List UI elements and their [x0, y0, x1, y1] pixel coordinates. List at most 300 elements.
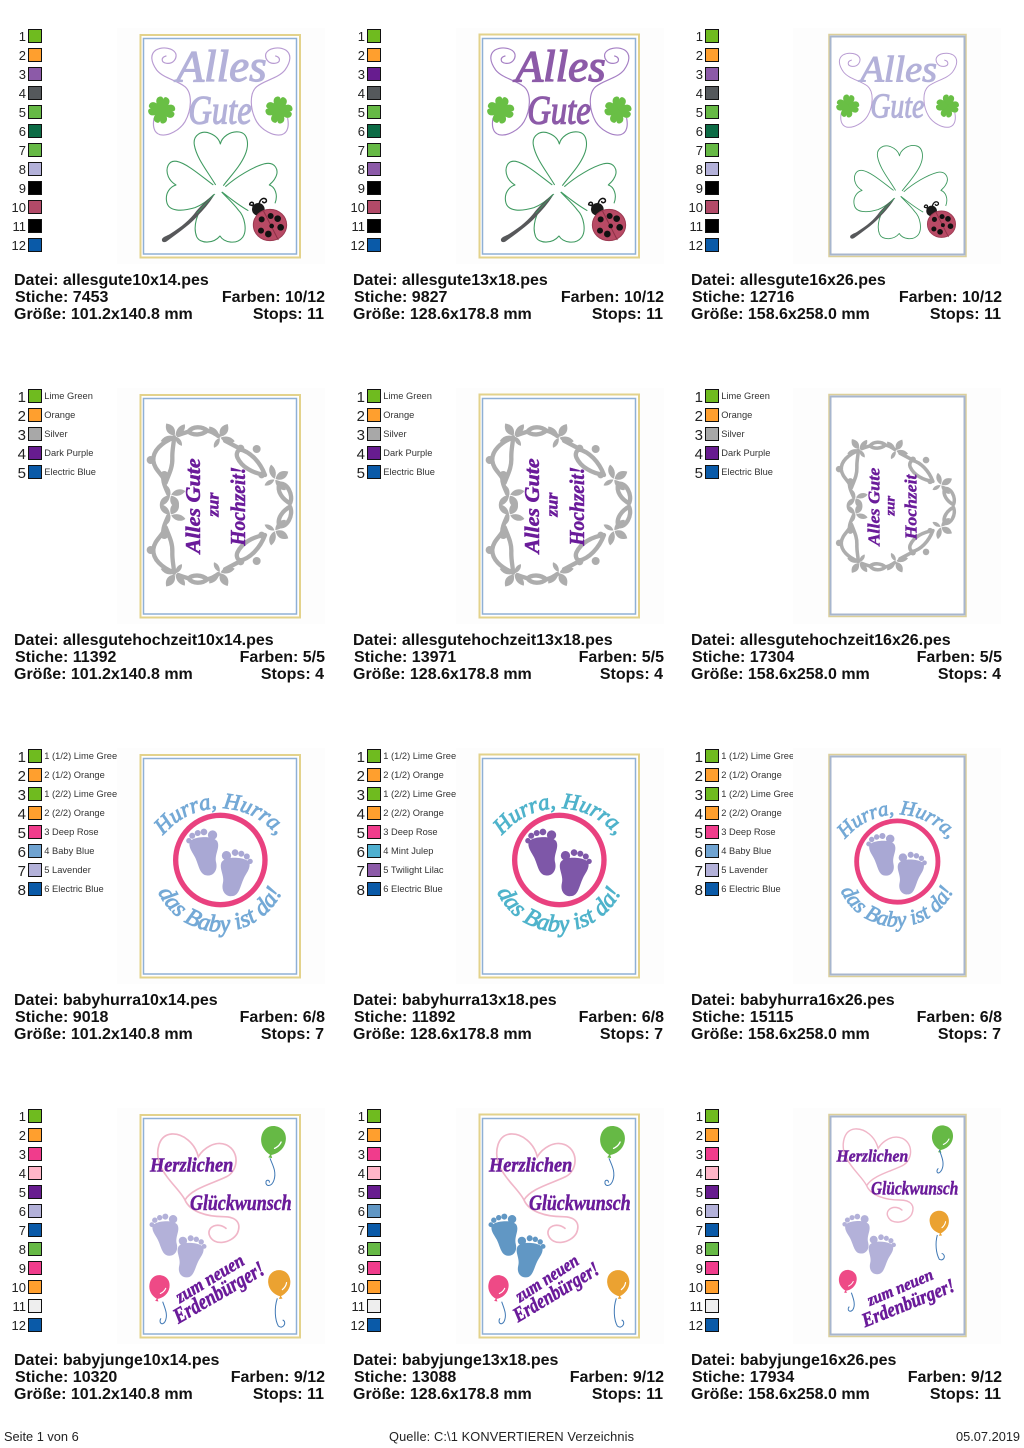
- colour legend: Orange: [383, 410, 414, 420]
- file details: Stiche: 9827: [354, 289, 447, 306]
- colour legend: 2: [18, 768, 26, 785]
- colour legend: 8: [358, 1242, 365, 1257]
- colour legend: 9: [19, 1261, 26, 1276]
- colour legend: 11: [12, 219, 26, 234]
- file details: Stops: 11: [930, 1386, 1001, 1403]
- colour legend: 8: [18, 882, 26, 899]
- file details: [14, 272, 325, 323]
- colour legend: 2: [19, 48, 26, 63]
- colour legend: 4 Baby Blue: [721, 846, 771, 856]
- colour legend: 3: [19, 1147, 26, 1162]
- colour legend: Dark Purple: [721, 448, 770, 458]
- colour legend: 9: [696, 1261, 703, 1276]
- embroidery: heart, feet, balloons, congratulations text: [836, 1124, 958, 1332]
- embroidery: Alles Gute clover: Alles: [513, 42, 606, 91]
- embroidery: heart, feet, balloons, congratulations text: Glückwunsch: [529, 1190, 631, 1215]
- colour legend: 3: [358, 67, 365, 82]
- file details: Datei: babyjunge10x14.pes: [14, 1352, 220, 1369]
- file details: Größe: 158.6x258.0 mm: [691, 1386, 870, 1403]
- card frame: [793, 388, 1001, 624]
- embroidery: heart, feet, balloons, congratulations text: [147, 1124, 292, 1329]
- colour legend: [689, 29, 718, 253]
- colour legend: 2: [696, 1128, 703, 1143]
- embroidery: heart, feet, balloons, congratulations text: zum neuen: [171, 1250, 248, 1308]
- colour legend: [689, 1109, 718, 1333]
- colour legend: 6: [19, 1204, 26, 1219]
- colour legend: 11: [690, 219, 703, 234]
- colour legend: [18, 749, 117, 899]
- file details: Größe: 101.2x140.8 mm: [14, 1386, 193, 1403]
- embroidery: Alles Gute clover: [486, 42, 633, 242]
- file details: Farben: 10/12: [899, 289, 1002, 306]
- panel: babyhurra16x26: [691, 749, 1002, 1043]
- colour legend: 9: [358, 181, 365, 196]
- colour legend: 6: [696, 1204, 703, 1219]
- colour legend: 12: [689, 1318, 703, 1333]
- file details: [353, 992, 664, 1043]
- colour legend: 4 Baby Blue: [44, 846, 94, 856]
- panel: allesgute13x18: [351, 28, 664, 323]
- embroidery: wreath with wedding text: Alles Gute: [865, 467, 884, 547]
- colour legend: 5: [357, 465, 365, 482]
- colour legend: 12: [351, 238, 365, 253]
- colour legend: 2: [696, 48, 703, 63]
- embroidery: Alles Gute clover: Gute: [527, 87, 591, 132]
- colour legend: 7: [19, 1223, 26, 1238]
- embroidery: baby feet in ring with arc text: das Baby ist da!: [158, 885, 281, 938]
- file details: Stops: 4: [938, 666, 1001, 683]
- colour legend: 5: [18, 465, 26, 482]
- embroidery: Alles Gute clover: Gute: [870, 87, 924, 125]
- file details: Stops: 11: [253, 1386, 324, 1403]
- colour legend: 4: [357, 446, 365, 463]
- colour legend: Electric Blue: [383, 467, 435, 477]
- colour legend: 6 Electric Blue: [44, 884, 104, 894]
- colour legend: 7: [357, 863, 365, 880]
- embroidery: heart, feet, balloons, congratulations text: zum neuen: [511, 1250, 582, 1306]
- colour legend: 3: [357, 427, 365, 444]
- colour legend: 7: [696, 143, 703, 158]
- colour legend: 2: [695, 768, 703, 785]
- colour legend: 4: [696, 86, 703, 101]
- file details: [691, 272, 1002, 323]
- colour legend: 11: [352, 1299, 365, 1314]
- colour legend: Dark Purple: [44, 448, 93, 458]
- colour legend: 4: [19, 1166, 26, 1181]
- colour legend: 10: [351, 1280, 365, 1295]
- colour legend: 2: [695, 408, 703, 425]
- colour legend: 5: [696, 1185, 703, 1200]
- card frame: [456, 1108, 664, 1344]
- embroidery: heart, feet, balloons, congratulations text: Glückwunsch: [871, 1178, 958, 1199]
- file details: Stops: 11: [253, 306, 324, 323]
- colour legend: 6: [357, 844, 365, 861]
- colour legend: 1: [358, 1109, 365, 1124]
- colour legend: 7: [358, 143, 365, 158]
- colour legend: 4: [18, 806, 26, 823]
- colour legend: 1: [358, 29, 365, 44]
- file details: Stops: 7: [261, 1026, 324, 1043]
- embroidery: heart, feet, balloons, congratulations text: Glückwunsch: [190, 1190, 292, 1215]
- file details: Datei: babyhurra10x14.pes: [14, 992, 218, 1009]
- colour legend: [18, 389, 96, 482]
- colour legend: 6: [358, 124, 365, 139]
- colour legend: 4: [358, 1166, 365, 1181]
- colour legend: 3: [695, 787, 703, 804]
- colour legend: 4: [358, 86, 365, 101]
- embroidery: baby feet in ring with arc text: [154, 793, 281, 938]
- file details: Stiche: 13088: [354, 1369, 456, 1386]
- card frame: [456, 388, 664, 624]
- card frame: [793, 1108, 1001, 1344]
- file details: [14, 1352, 325, 1403]
- colour legend: [695, 749, 794, 899]
- colour legend: 2 (1/2) Orange: [721, 770, 782, 780]
- embroidery: heart, feet, balloons, congratulations text: Herzlichen: [488, 1155, 572, 1177]
- colour legend: 9: [19, 181, 26, 196]
- file details: Stiche: 17934: [692, 1369, 794, 1386]
- file details: [353, 272, 664, 323]
- file details: Stops: 11: [592, 306, 663, 323]
- colour legend: 11: [352, 219, 365, 234]
- panel: allesgutehochzeit16x26: [691, 388, 1002, 683]
- embroidery: wreath with wedding text: [486, 415, 635, 595]
- colour legend: 4: [695, 806, 703, 823]
- file details: Größe: 128.6x178.8 mm: [353, 1386, 532, 1403]
- colour legend: 6: [19, 124, 26, 139]
- colour legend: 10: [689, 200, 703, 215]
- panel: allesgute16x26: [689, 28, 1002, 323]
- file details: Farben: 9/12: [908, 1369, 1002, 1386]
- colour legend: 2: [357, 408, 365, 425]
- colour legend: 4 Mint Julep: [383, 846, 433, 856]
- embroidery: baby feet in ring with arc text: Hurra, Hurra,: [154, 793, 280, 836]
- colour legend: 1 (2/2) Lime Gree: [721, 789, 794, 799]
- file details: Farben: 6/8: [917, 1009, 1002, 1026]
- colour legend: 12: [689, 238, 703, 253]
- colour legend: 2: [19, 1128, 26, 1143]
- colour legend: 7: [358, 1223, 365, 1238]
- file details: Stiche: 11392: [15, 649, 116, 666]
- embroidery: heart, feet, balloons, congratulations text: Herzlichen: [836, 1146, 908, 1165]
- colour legend: 1: [696, 1109, 703, 1124]
- embroidery: wreath with wedding text: zur: [203, 492, 222, 518]
- colour legend: 7: [696, 1223, 703, 1238]
- colour legend: 6: [358, 1204, 365, 1219]
- embroidery: baby feet in ring with arc text: das Baby ist da!: [498, 884, 620, 938]
- card frame: [117, 1108, 325, 1344]
- file details: Datei: allesgute10x14.pes: [14, 272, 209, 289]
- colour legend: 10: [351, 200, 365, 215]
- embroidery: heart, feet, balloons, congratulations text: [486, 1124, 631, 1327]
- colour legend: 5: [695, 825, 703, 842]
- file details: Stiche: 11892: [354, 1009, 456, 1026]
- colour legend: 4: [19, 86, 26, 101]
- colour legend: Silver: [383, 429, 407, 439]
- colour legend: 2: [357, 768, 365, 785]
- colour legend: 5 Lavender: [44, 865, 91, 875]
- colour legend: [12, 29, 42, 253]
- card frame: [117, 388, 325, 624]
- embroidery: wreath with wedding text: zur: [883, 495, 898, 517]
- colour legend: Orange: [721, 410, 752, 420]
- file details: Farben: 6/8: [579, 1009, 664, 1026]
- panel: babyjunge16x26: [689, 1108, 1002, 1403]
- colour legend: Lime Green: [721, 391, 770, 401]
- file details: Farben: 5/5: [240, 649, 325, 666]
- file details: Größe: 158.6x258.0 mm: [691, 306, 870, 323]
- colour legend: 6 Electric Blue: [721, 884, 781, 894]
- file details: Stops: 11: [592, 1386, 663, 1403]
- card frame: [456, 28, 664, 264]
- colour legend: 9: [358, 1261, 365, 1276]
- colour legend: 4: [696, 1166, 703, 1181]
- embroidery: baby feet in ring with arc text: [492, 793, 620, 938]
- file details: Stops: 4: [600, 666, 663, 683]
- colour legend: 3: [696, 67, 703, 82]
- panel: babyjunge13x18: [351, 1108, 664, 1403]
- embroidery: wreath with wedding text: Hochzeit!: [567, 467, 589, 547]
- colour legend: [695, 389, 773, 482]
- colour legend: 8: [19, 162, 26, 177]
- colour legend: 8: [696, 1242, 703, 1257]
- colour legend: [351, 1109, 380, 1333]
- footer: source path: Quelle: C:\1 KONVERTIEREN Verzeichnis: [389, 1429, 634, 1444]
- file details: Größe: 101.2x140.8 mm: [14, 666, 193, 683]
- colour legend: Orange: [44, 410, 75, 420]
- file details: [691, 632, 1002, 683]
- colour legend: 4: [18, 446, 26, 463]
- panel: babyjunge10x14: [12, 1108, 325, 1403]
- colour legend: Dark Purple: [383, 448, 432, 458]
- colour legend: 3: [19, 67, 26, 82]
- colour legend: 3 Deep Rose: [721, 827, 776, 837]
- file details: Datei: babyhurra16x26.pes: [691, 992, 895, 1009]
- colour legend: 6: [696, 124, 703, 139]
- embroidery: Alles Gute clover: Alles: [857, 49, 937, 90]
- file details: Stops: 7: [938, 1026, 1001, 1043]
- panel: babyhurra13x18: [353, 749, 664, 1043]
- colour legend: 2 (2/2) Orange: [44, 808, 105, 818]
- file details: Datei: allesgutehochzeit13x18.pes: [353, 632, 613, 649]
- card frame: [793, 748, 1001, 984]
- file details: Datei: babyjunge13x18.pes: [353, 1352, 559, 1369]
- file details: Farben: 10/12: [561, 289, 664, 306]
- colour legend: 8: [696, 162, 703, 177]
- colour legend: 8: [695, 882, 703, 899]
- file details: Farben: 5/5: [917, 649, 1002, 666]
- embroidery: baby feet in ring with arc text: Hurra, Hurra,: [836, 800, 952, 840]
- colour legend: [351, 29, 380, 253]
- colour legend: 4: [695, 446, 703, 463]
- colour legend: 9: [696, 181, 703, 196]
- colour legend: 1 (1/2) Lime Gree: [44, 751, 117, 761]
- file details: Größe: 101.2x140.8 mm: [14, 306, 193, 323]
- file details: Datei: babyhurra13x18.pes: [353, 992, 557, 1009]
- colour legend: 5 Twilight Lilac: [383, 865, 444, 875]
- file details: Stops: 7: [600, 1026, 663, 1043]
- file details: Stiche: 7453: [15, 289, 108, 306]
- colour legend: 5: [18, 825, 26, 842]
- colour legend: 5: [357, 825, 365, 842]
- file details: Farben: 10/12: [222, 289, 325, 306]
- colour legend: 7: [695, 863, 703, 880]
- file details: [14, 632, 325, 683]
- file details: Farben: 9/12: [570, 1369, 664, 1386]
- colour legend: 2: [358, 48, 365, 63]
- file details: Datei: babyjunge16x26.pes: [691, 1352, 897, 1369]
- colour legend: 8: [357, 882, 365, 899]
- panel: babyhurra10x14: [14, 749, 325, 1043]
- colour legend: 5: [19, 105, 26, 120]
- colour legend: 5: [358, 1185, 365, 1200]
- file details: Stops: 11: [930, 306, 1001, 323]
- embroidery: Alles Gute clover: [835, 49, 960, 239]
- colour legend: 5 Lavender: [721, 865, 768, 875]
- embroidery: baby feet in ring with arc text: das Baby ist da!: [841, 884, 952, 932]
- colour legend: 6 Electric Blue: [383, 884, 443, 894]
- colour legend: 7: [19, 143, 26, 158]
- colour legend: 3: [18, 427, 26, 444]
- colour legend: Electric Blue: [44, 467, 96, 477]
- file details: Farben: 9/12: [231, 1369, 325, 1386]
- colour legend: [12, 1109, 42, 1333]
- colour legend: [357, 749, 456, 899]
- file details: Farben: 5/5: [579, 649, 664, 666]
- embroidery: Alles Gute clover: Alles: [174, 42, 267, 91]
- panel: allesgutehochzeit10x14: [14, 388, 325, 683]
- file details: Größe: 101.2x140.8 mm: [14, 1026, 193, 1043]
- embroidery: wreath with wedding text: [147, 415, 296, 595]
- file details: Größe: 128.6x178.8 mm: [353, 306, 532, 323]
- card frame: [117, 748, 325, 984]
- colour legend: 2 (2/2) Orange: [383, 808, 444, 818]
- file details: [14, 992, 325, 1043]
- file details: Stiche: 12716: [692, 289, 794, 306]
- colour legend: 5: [696, 105, 703, 120]
- colour legend: 8: [358, 162, 365, 177]
- card frame: [456, 748, 664, 984]
- colour legend: 1: [357, 749, 365, 766]
- colour legend: 10: [12, 200, 26, 215]
- embroidery: Alles Gute clover: Gute: [188, 87, 252, 132]
- colour legend: 3: [18, 787, 26, 804]
- footer: date: 05.07.2019: [956, 1429, 1020, 1444]
- embroidery: wreath with wedding text: Hochzeit: [901, 473, 920, 540]
- file details: [691, 992, 1002, 1043]
- file details: Datei: allesgutehochzeit16x26.pes: [691, 632, 951, 649]
- colour legend: 8: [19, 1242, 26, 1257]
- colour legend: [357, 389, 435, 482]
- file details: Stops: 4: [261, 666, 324, 683]
- colour legend: 2: [358, 1128, 365, 1143]
- colour legend: 5: [695, 465, 703, 482]
- colour legend: 12: [12, 238, 26, 253]
- file details: Datei: allesgutehochzeit10x14.pes: [14, 632, 274, 649]
- embroidery: wreath with wedding text: zur: [542, 492, 561, 518]
- embroidery: heart, feet, balloons, congratulations text: Erdenbürger!: [509, 1258, 603, 1327]
- embroidery: wreath with wedding text: [836, 432, 958, 580]
- colour legend: 1: [19, 29, 26, 44]
- colour legend: 1: [19, 1109, 26, 1124]
- embroidery: wreath with wedding text: Alles Gute: [522, 458, 544, 555]
- card frame: [117, 28, 325, 264]
- colour legend: 10: [12, 1280, 26, 1295]
- file details: Größe: 158.6x258.0 mm: [691, 1026, 870, 1043]
- file details: Stiche: 9018: [15, 1009, 108, 1026]
- file details: Stiche: 17304: [692, 649, 794, 666]
- colour legend: 3 Deep Rose: [383, 827, 438, 837]
- colour legend: 3: [696, 1147, 703, 1162]
- colour legend: 1: [695, 749, 703, 766]
- colour legend: 2 (1/2) Orange: [383, 770, 444, 780]
- colour legend: 11: [12, 1299, 26, 1314]
- colour legend: 10: [689, 1280, 703, 1295]
- file details: Größe: 128.6x178.8 mm: [353, 1026, 532, 1043]
- embroidery: Alles Gute clover: [147, 42, 294, 242]
- colour legend: 1: [357, 389, 365, 406]
- colour legend: 2 (1/2) Orange: [44, 770, 105, 780]
- colour legend: 12: [12, 1318, 26, 1333]
- colour legend: 1: [695, 389, 703, 406]
- footer: page number: Seite 1 von 6: [4, 1429, 79, 1444]
- file details: Stiche: 15115: [692, 1009, 794, 1026]
- colour legend: 5: [358, 105, 365, 120]
- colour legend: 2 (2/2) Orange: [721, 808, 782, 818]
- colour legend: Lime Green: [383, 391, 432, 401]
- file details: [353, 1352, 664, 1403]
- colour legend: 6: [18, 844, 26, 861]
- file details: Stiche: 13971: [354, 649, 456, 666]
- embroidery: baby feet in ring with arc text: [836, 800, 952, 932]
- colour legend: 1: [18, 749, 26, 766]
- embroidery: baby feet in ring with arc text: Hurra, Hurra,: [492, 793, 620, 836]
- file details: Größe: 158.6x258.0 mm: [691, 666, 870, 683]
- colour legend: 5: [19, 1185, 26, 1200]
- colour legend: 1 (1/2) Lime Gree: [383, 751, 456, 761]
- colour legend: 3: [357, 787, 365, 804]
- colour legend: 2: [18, 408, 26, 425]
- colour legend: 3 Deep Rose: [44, 827, 99, 837]
- file details: Farben: 6/8: [240, 1009, 325, 1026]
- colour legend: Electric Blue: [721, 467, 773, 477]
- file details: [691, 1352, 1002, 1403]
- colour legend: 4: [357, 806, 365, 823]
- colour legend: 11: [690, 1299, 703, 1314]
- file details: Größe: 128.6x178.8 mm: [353, 666, 532, 683]
- colour legend: 7: [18, 863, 26, 880]
- panel: allesgutehochzeit13x18: [353, 388, 664, 683]
- colour legend: 1: [696, 29, 703, 44]
- file details: Datei: allesgute13x18.pes: [353, 272, 548, 289]
- embroidery: heart, feet, balloons, congratulations text: zum neuen: [863, 1265, 936, 1310]
- colour legend: 1 (1/2) Lime Gree: [721, 751, 794, 761]
- colour legend: 12: [351, 1318, 365, 1333]
- file details: [353, 632, 664, 683]
- colour legend: 1 (2/2) Lime Gree: [44, 789, 117, 799]
- panel: allesgute10x14: [12, 28, 325, 323]
- colour legend: 3: [358, 1147, 365, 1162]
- card frame: [793, 28, 1001, 264]
- colour legend: Silver: [44, 429, 68, 439]
- colour legend: 6: [695, 844, 703, 861]
- embroidery: wreath with wedding text: Hochzeit!: [228, 467, 250, 547]
- embroidery: wreath with wedding text: Alles Gute: [183, 458, 205, 555]
- colour legend: 3: [695, 427, 703, 444]
- colour legend: Lime Green: [44, 391, 93, 401]
- colour legend: Silver: [721, 429, 745, 439]
- file details: Stiche: 10320: [15, 1369, 117, 1386]
